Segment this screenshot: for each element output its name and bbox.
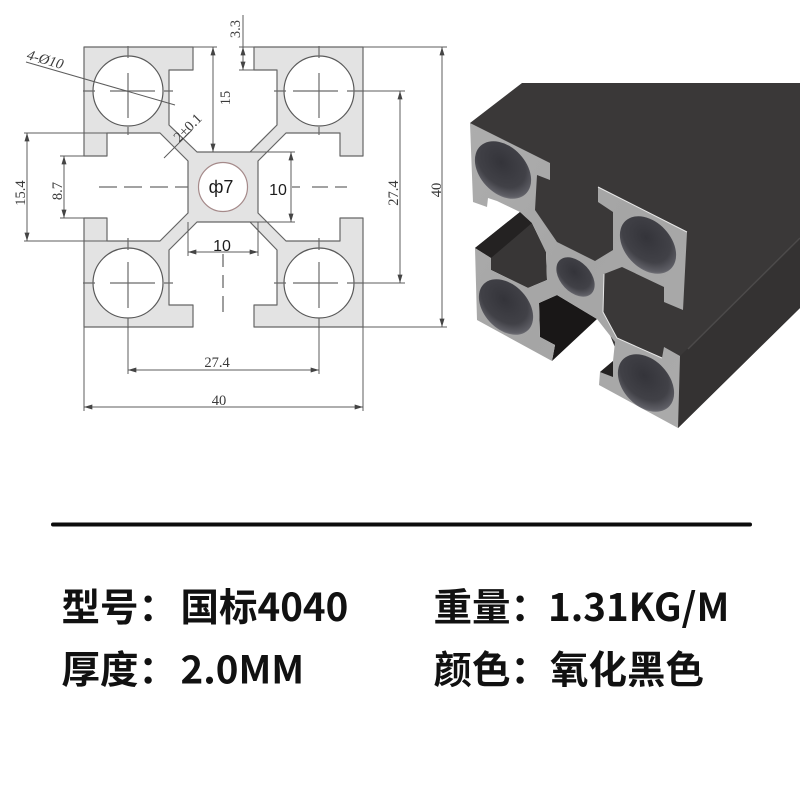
- spec: model: 国标4040: [180, 577, 348, 633]
- body lower side shading: [678, 238, 800, 428]
- spec: weight: 1.31KG/M: [548, 577, 729, 633]
- corner holes: [93, 56, 354, 318]
- dimension: 15.4: [13, 133, 107, 241]
- dimension: 2±0.1: 2±0.1: [171, 111, 206, 146]
- left channel: [475, 212, 547, 288]
- dimension: 40 vertical: 40: [429, 183, 445, 197]
- spec: thickness: [62, 640, 304, 696]
- dimension: 10 horizontal: [188, 222, 258, 256]
- aluminium end face: [470, 123, 687, 428]
- dimension: 40 horizontal: [84, 327, 363, 411]
- spec: weight: 重量：: [434, 577, 549, 633]
- dark body: [470, 83, 800, 428]
- hole: top right: [609, 205, 687, 285]
- dimension: 27.4 vertical: 27.4: [386, 180, 402, 206]
- small notch: [600, 361, 613, 377]
- profile outline: [84, 47, 363, 327]
- 3D black anodized profile render: [464, 83, 800, 428]
- bottom channel: [539, 295, 597, 361]
- dimension: 40 horizontal: 40: [212, 393, 226, 409]
- technical drawing: 4040 profile cross-section: [13, 15, 447, 411]
- hole: top left: [464, 130, 542, 210]
- spec: model: [62, 577, 348, 633]
- centre lines: [83, 46, 364, 328]
- dimension: 15: 15: [218, 91, 234, 105]
- dimension: 4-Ø10: [25, 47, 175, 105]
- body edge highlight: [688, 238, 800, 349]
- dimension: 27.4 vertical: [364, 91, 405, 283]
- spec: colour: 氧化黑色: [550, 640, 704, 696]
- dimension: 3.3: [228, 15, 254, 70]
- dimension: 15.4: 15.4: [13, 180, 29, 206]
- dimension: 40 vertical: [363, 47, 447, 327]
- dimension: 8.7: 8.7: [50, 182, 66, 200]
- divider line: [53, 522, 750, 526]
- dimension: 10 horizontal: 10: [213, 238, 231, 255]
- dimension: 4-Ø10: 4-Ø10: [25, 47, 66, 73]
- dimension: 10 vertical: 10: [269, 182, 287, 199]
- dimension: phi 7: ф7: [209, 177, 233, 197]
- dimension: 2±0.1: [164, 111, 206, 158]
- dimension: 15: [193, 47, 234, 152]
- face edge highlights: [598, 187, 687, 358]
- dimension: 27.4 horizontal: [128, 327, 319, 374]
- hole: lower left: [468, 269, 544, 345]
- dimension: 10 vertical: [250, 152, 295, 222]
- hole: centre: [549, 250, 602, 304]
- spec: weight: [434, 577, 729, 633]
- spec: thickness: 2.0MM: [180, 640, 304, 696]
- hole: lower right: [607, 343, 685, 423]
- centre hole: [198, 162, 248, 212]
- spec: colour: 颜色：: [434, 640, 549, 696]
- dimension: 27.4 horizontal: 27.4: [204, 355, 230, 371]
- dimension: 3.3: 3.3: [228, 20, 244, 38]
- spec: model: 型号：: [62, 577, 177, 633]
- spec: thickness: 厚度：: [62, 640, 177, 696]
- spec: colour: [434, 640, 704, 696]
- dimension: 8.7: [50, 156, 84, 218]
